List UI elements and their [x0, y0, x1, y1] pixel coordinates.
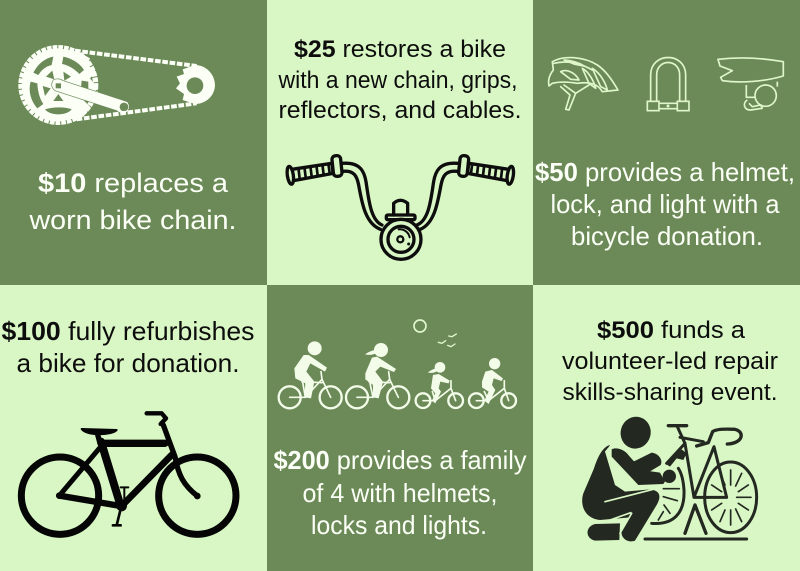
icon: family of cyclists	[279, 320, 516, 408]
panel: $10 chain	[0, 0, 267, 285]
icon: father cyclist	[279, 341, 342, 408]
text: $500 line 2: volunteer-led repair	[562, 348, 778, 375]
text: $200 line 2: of 4 with helmets,	[302, 478, 498, 508]
text: $25 line 3: reflectors, and cables.	[278, 97, 522, 124]
text: $100 line 2: a bike for donation.	[16, 348, 240, 378]
icon: birds	[438, 334, 456, 347]
panel: $200 family	[267, 285, 533, 571]
text: $500 line 3: skills-sharing event.	[562, 379, 778, 406]
text: $500: $500 funds a	[597, 317, 746, 344]
text: $50: $50 provides a helmet,	[535, 157, 795, 187]
panel: $50 safety gear	[533, 0, 800, 285]
icon: bicycle	[21, 413, 236, 534]
text: $50 line 3: bicycle donation.	[571, 221, 763, 251]
text: $200: $200 provides a family	[274, 445, 526, 475]
icon: chain and crank	[21, 48, 215, 122]
icon: handlebar	[286, 155, 515, 259]
icon: sun	[414, 320, 426, 332]
icon: mechanic repairing bike	[582, 413, 757, 541]
icon: girl cyclist	[416, 362, 463, 408]
text: $25 line 2: with a new chain, grips,	[278, 67, 518, 94]
icon: mother cyclist	[346, 343, 409, 408]
icon: bike light	[718, 58, 783, 110]
panel: $500 skills event	[533, 285, 800, 571]
icon: boy cyclist	[469, 358, 516, 408]
panel: $25 restore	[267, 0, 533, 285]
text: $200 line 3: locks and lights.	[311, 510, 487, 540]
icon: U-lock	[647, 57, 689, 111]
text: $25: $25 restores a bike	[294, 36, 506, 63]
icon: helmet	[549, 58, 618, 110]
text: $100: $100 fully refurbishes	[2, 316, 255, 346]
text: $50 line 2: lock, and light with a	[550, 189, 780, 219]
text: $10 line 2: worn bike chain.	[28, 205, 236, 235]
text: $10: $10 replaces a	[38, 168, 229, 198]
panel: $100 refurbish	[0, 285, 267, 571]
